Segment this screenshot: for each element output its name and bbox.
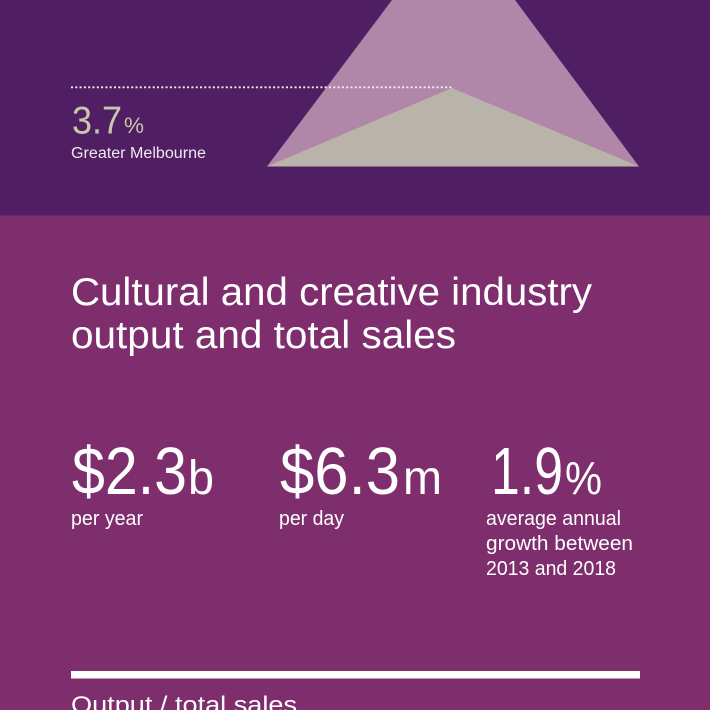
panel: output and total sales	[0, 216, 710, 710]
stat: $6.3m per day: per day	[279, 508, 344, 530]
stat: $6.3m per day: $6.3	[280, 434, 400, 509]
heading: Cultural and creative industry	[71, 271, 593, 314]
chart: outer triangle	[267, 0, 639, 166]
stat: $2.3b per year: per year	[71, 508, 143, 530]
stat: $2.3b per year: b	[188, 452, 214, 505]
panel: Greater Melbourne share	[0, 0, 710, 216]
heading	[71, 271, 593, 357]
stat: 1.9% growth: 2013 and 2018	[486, 558, 616, 580]
dotted leader line	[71, 86, 453, 88]
divider bar	[71, 671, 640, 678]
stat: 1.9% growth: %	[565, 452, 602, 504]
chart: inner Greater Melbourne triangle	[267, 88, 639, 166]
stat: 1.9% growth: average annual	[486, 508, 621, 530]
stat: 1.9% growth: growth between	[486, 533, 633, 555]
stat unit: percent: %	[124, 113, 144, 138]
stat: $6.3m per day: m	[403, 452, 442, 505]
stat: 3.7%: 3.7	[72, 100, 122, 142]
stat: 1.9% growth	[486, 434, 633, 580]
stat: $2.3b per year: $2.3	[72, 434, 187, 509]
heading: output and total sales	[71, 314, 456, 357]
label: Greater Melbourne: Greater Melbourne	[71, 145, 206, 162]
stat: $6.3m per day	[279, 434, 442, 530]
stat: 1.9% growth: 1.9	[491, 434, 563, 509]
